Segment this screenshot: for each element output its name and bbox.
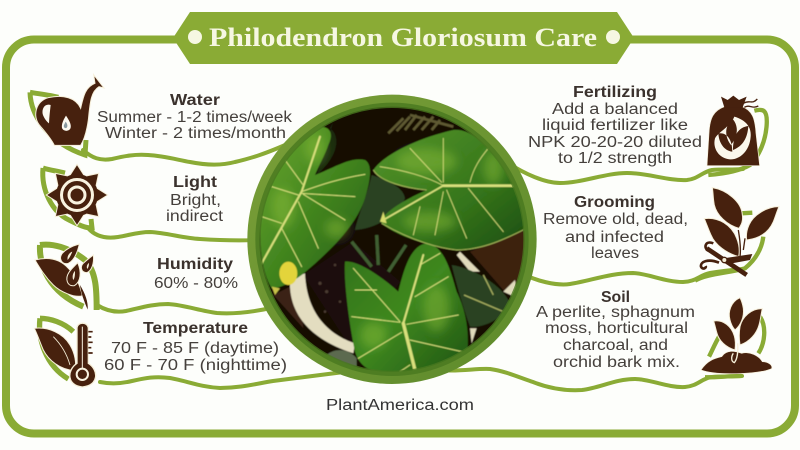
text: soil: A perlite, sphagnum [536, 304, 695, 321]
leaf veins [262, 137, 513, 372]
icon: grooming shears and leaves [695, 188, 779, 281]
icon: thermometer [34, 318, 96, 387]
text: light: Light [173, 174, 217, 191]
photo content [259, 106, 524, 372]
text: grooming [543, 194, 688, 262]
text: water: Winter - 2 times/month [105, 125, 286, 142]
text: light: indirect [166, 208, 224, 225]
text: humidity: Humidity [157, 256, 233, 273]
icon: fertilizer bag [707, 96, 767, 175]
leaf left [260, 127, 370, 288]
text: fertilizing: Add a balanced [552, 101, 678, 118]
text: temperature [104, 320, 287, 374]
wavy connector lines [83, 142, 743, 390]
text: water: Summer - 1-2 times/week [97, 109, 292, 126]
text: grooming: and infected [565, 229, 664, 246]
photo ring [247, 95, 537, 384]
text: grooming: leaves [591, 245, 639, 262]
leaf right [373, 130, 527, 250]
icon: water can [30, 75, 104, 155]
photo inner ring shading [258, 105, 526, 373]
text: soil: charcoal, and [563, 337, 668, 354]
text: grooming: Remove old, dead, [543, 211, 688, 228]
text: fertilizing: Fertilizing [573, 84, 657, 101]
text: humidity [154, 256, 238, 292]
text: humidity: 60% - 80% [154, 275, 238, 292]
text: soil: moss, horticultural [545, 320, 688, 337]
icon: humidity [35, 244, 97, 310]
leaf lower [345, 243, 468, 374]
text: light: Bright, [170, 192, 221, 209]
text: fertilizing: NPK 20-20-20 diluted [528, 134, 702, 151]
text: temperature: Temperature [143, 320, 248, 337]
title banner [173, 12, 634, 64]
yellow spot [279, 262, 297, 285]
icon: soil and sprout [701, 298, 772, 377]
text: temperature: 60 F - 70 F (nighttime) [104, 357, 287, 374]
text: soil [536, 289, 695, 371]
text: soil: Soil [601, 289, 630, 306]
text: fertilizing [528, 84, 702, 167]
text: soil: orchid bark mix. [553, 354, 680, 371]
icon: sun [43, 164, 108, 228]
website credit: PlantAmerica.com [326, 397, 474, 414]
text: grooming: Grooming [574, 194, 655, 211]
text: fertilizing: to 1/2 strength [558, 150, 672, 167]
center plant photo [240, 95, 540, 385]
back dark leaf [355, 175, 405, 230]
text: temperature: 70 F - 85 F (daytime) [111, 340, 279, 357]
light patches [272, 133, 503, 348]
text: water: Water [170, 92, 220, 109]
text: fertilizing: liquid fertilizer like [542, 117, 688, 134]
title: Philodendron Gloriosum Care [209, 23, 597, 52]
text: water [97, 92, 292, 142]
text: light [166, 174, 224, 225]
